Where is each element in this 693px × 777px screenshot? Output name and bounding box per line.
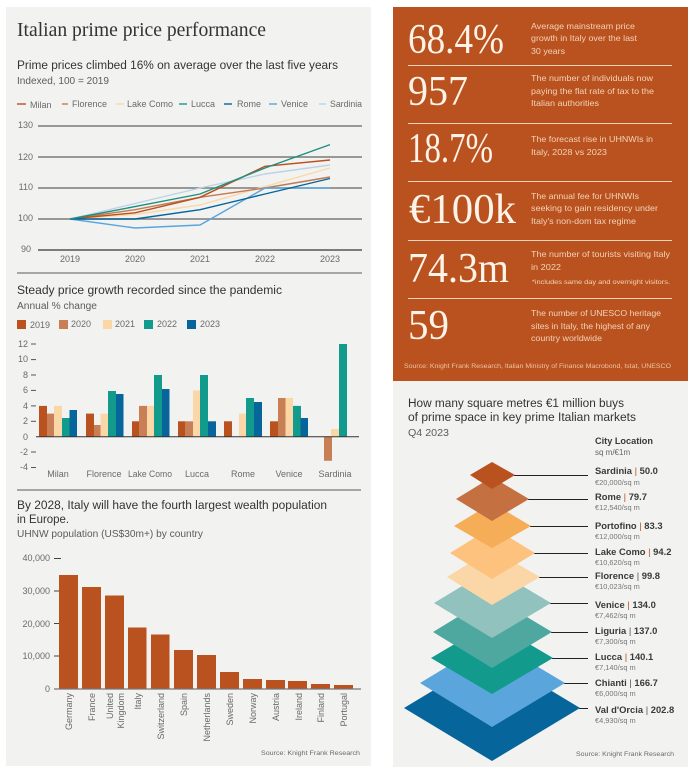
label: Liguria [595, 625, 657, 646]
wealth bar chart: 30,000 [22, 586, 50, 596]
stat: 18.7%: The forecast rise in UHNWIs in [531, 134, 653, 144]
line chart subtitle: Indexed, 100 = 2019 [17, 76, 109, 87]
bars: Venice [270, 398, 308, 437]
wealth bar chart: 10,000 [22, 651, 50, 661]
wealth bar chart: France [87, 693, 97, 721]
grouped bar chart subtitle: Annual % change [17, 301, 97, 312]
label: Lake Como [595, 546, 671, 567]
stat: 74.3m: in 2022 [531, 262, 561, 272]
stat: 74.3m: 74.3m [408, 246, 509, 292]
stat: 68.4%: 68.4% [408, 17, 504, 63]
stat: 68.4%: growth in Italy over the last [531, 33, 638, 43]
label: Rome: Rome | 79.7 [595, 491, 647, 502]
stat: €100k [409, 187, 658, 233]
pyramid diagram [404, 462, 580, 761]
stat: 957: The number of individuals now [531, 73, 654, 83]
line chart legend [17, 99, 362, 110]
grouped bar chart: Lucca [185, 469, 209, 479]
line chart: 90 [21, 244, 31, 254]
bars: Milan [39, 406, 77, 437]
bars: Lake Como [132, 375, 170, 437]
line chart legend: Milan [30, 100, 52, 110]
grouped bar chart: 0 [23, 432, 28, 442]
bars: Rome [224, 398, 262, 437]
stat: 59: The number of UNESCO heritage [531, 308, 661, 318]
grouped bar chart: Florence [86, 469, 122, 479]
pyramid heading: of prime space in key prime Italian markets [408, 410, 636, 424]
label: Rome [595, 491, 647, 512]
label: Sardinia: Sardinia | 50.0 [595, 465, 658, 476]
wealth chart heading: By 2028, Italy will have the fourth largest wealth population [17, 498, 327, 512]
bars: Lucca [178, 375, 216, 437]
line chart legend: Venice [281, 99, 308, 109]
label: Chianti: Chianti | 166.7 [595, 677, 658, 688]
line chart: 130 [18, 120, 33, 130]
grouped bar chart: 4 [23, 401, 28, 411]
stat: 59 [408, 303, 661, 349]
stat: 68.4% [408, 17, 638, 63]
title: Italian prime price performance [17, 19, 266, 41]
stat: 18.7% [408, 126, 653, 172]
grouped bar chart legend: 2023 [200, 319, 220, 329]
label: Portofino [595, 520, 663, 541]
label: Val d'Orcia: €4,930/sq m [595, 716, 636, 725]
label: Liguria: Liguria | 137.0 [595, 625, 657, 636]
wealth bar chart: Germany [64, 693, 74, 730]
wealth bar chart: 0 [45, 684, 50, 694]
label: Chianti [595, 677, 658, 698]
label: Florence [595, 570, 660, 591]
bars: Florence [86, 391, 124, 437]
pyramid subtitle: Q4 2023 [408, 428, 449, 439]
legend header: City Location [595, 435, 653, 446]
label: Lake Como: Lake Como | 94.2 [595, 546, 671, 557]
grouped bar chart: Sardinia [318, 469, 352, 479]
grouped bar chart: -4 [20, 462, 28, 472]
wealth bar chart [22, 553, 361, 742]
stat: 18.7%: 18.7% [408, 126, 493, 172]
label: Lucca: €7,140/sq m [595, 663, 636, 672]
pyramid heading [408, 396, 636, 424]
label: Sardinia: €20,000/sq m [595, 478, 640, 487]
stat: €100k: seeking to gain residency under [531, 203, 658, 213]
wealth bar chart: Austria [271, 693, 281, 721]
source: Source: Knight Frank Research, Italian Ministry of Finance Macrobond, Istat, UNESCO [404, 363, 671, 370]
line chart heading: Prime prices climbed 16% on average over the last five years [17, 58, 338, 72]
stat: 74.3m: The number of tourists visiting Italy [531, 249, 671, 259]
legend header: sq m/€1m [595, 448, 630, 457]
wealth bar chart: Kingdom [116, 693, 126, 729]
wealth chart heading line 2: in Europe. [17, 512, 69, 526]
wealth bar chart: Italy [133, 693, 143, 710]
source: Source: Knight Frank Research [261, 750, 360, 757]
grouped bar chart legend: 2021 [115, 319, 135, 329]
line chart: 2019 [60, 254, 80, 264]
wealth bar chart: Spain [179, 693, 189, 716]
label: Venice: Venice | 134.0 [595, 599, 656, 610]
line chart: 2020 [125, 254, 145, 264]
stat: 59: country worldwide [531, 333, 602, 343]
grouped bar chart: Milan [47, 469, 69, 479]
label: Chianti: €6,000/sq m [595, 689, 636, 698]
wealth chart subtitle: UHNW population (US$30m+) by country [17, 529, 203, 540]
panel: square metres per €1 million [393, 381, 688, 767]
wealth bar chart: Finland [316, 693, 326, 723]
line chart: 100 [18, 213, 33, 223]
label: Val d'Orcia [595, 704, 674, 725]
stat: 18.7%: Italy, 2028 vs 2023 [531, 147, 607, 157]
grouped bar chart: Lake Como [128, 469, 172, 479]
label: Rome: €12,540/sq m [595, 503, 640, 512]
wealth bar chart: 40,000 [22, 553, 50, 563]
label: Portofino: €12,000/sq m [595, 532, 640, 541]
label: Lucca: Lucca | 140.1 [595, 651, 653, 662]
panel: Italian prime price performance [6, 7, 371, 766]
label: Val d'Orcia: Val d'Orcia | 202.8 [595, 704, 674, 715]
stat: 68.4%: Average mainstream price [531, 21, 635, 31]
label: Venice: €7,462/sq m [595, 611, 636, 620]
stat: 957: paying the flat rate of tax to the [531, 86, 654, 96]
line chart legend: Rome [237, 99, 261, 109]
label: Liguria: €7,300/sq m [595, 637, 636, 646]
wealth bar chart: Sweden [225, 693, 235, 726]
wealth bar chart: Netherlands [202, 693, 212, 742]
source: Source: Knight Frank Research [576, 751, 674, 758]
wealth bar chart: Ireland [294, 693, 304, 721]
panel: key statistics [393, 7, 688, 381]
pyramid heading: How many square metres €1 million buys [408, 396, 624, 410]
stat: 74.3m: *includes same day and overnight visitors. [532, 279, 670, 286]
grouped bar chart heading: Steady price growth recorded since the pandemic [17, 283, 282, 297]
wealth bar chart: Norway [248, 693, 258, 724]
grouped bar chart: 8 [23, 370, 28, 380]
label: Lucca [595, 651, 653, 672]
wealth bar chart: 20,000 [22, 619, 50, 629]
stat: €100k: Italy's non-dom tax regime [531, 216, 636, 226]
legend header [595, 435, 653, 457]
grouped bar chart: 10 [18, 354, 28, 364]
grouped bar chart legend: 2022 [157, 319, 177, 329]
label: Lake Como: €10,620/sq m [595, 558, 640, 567]
stat: 59: sites in Italy, the highest of any [531, 321, 651, 331]
line chart legend: Florence [72, 99, 107, 109]
stat: 74.3m [408, 246, 671, 292]
grouped bar chart legend: 2020 [71, 319, 91, 329]
grouped bar chart: -2 [20, 447, 28, 457]
grouped bar chart: 6 [23, 385, 28, 395]
wealth bar chart: Portugal [339, 693, 349, 727]
leader lines [514, 476, 588, 708]
stat: 957 [408, 69, 654, 115]
grouped bar chart: Venice [275, 469, 303, 479]
stat: 59: 59 [408, 303, 449, 349]
line chart: 2022 [255, 254, 275, 264]
grouped bar chart legend: 2019 [30, 320, 50, 330]
wealth bar chart: United [105, 693, 115, 719]
stat: €100k: €100k [409, 187, 516, 233]
bars: Sardinia [324, 344, 347, 461]
grouped bar chart [18, 339, 359, 479]
line chart legend: Sardinia [330, 99, 362, 109]
line chart: 110 [19, 182, 33, 192]
stat: €100k: The annual fee for UHNWIs [531, 191, 639, 201]
label: Portofino: Portofino | 83.3 [595, 520, 663, 531]
grouped bar chart: Rome [231, 469, 255, 479]
line chart [18, 120, 362, 264]
grouped bar chart legend [17, 319, 220, 330]
grouped bar chart: 12 [18, 339, 28, 349]
label: Florence: €10,023/sq m [595, 582, 640, 591]
stat: 957: Italian authorities [531, 98, 599, 108]
line chart legend: Lake Como [127, 99, 173, 109]
label: Florence: Florence | 99.8 [595, 570, 660, 581]
wealth bar chart: Switzerland [156, 693, 166, 740]
label: Venice [595, 599, 656, 620]
line chart: 120 [18, 152, 33, 162]
stat: 957: 957 [408, 69, 468, 115]
line chart: 2023 [320, 254, 340, 264]
line chart: 2021 [190, 254, 210, 264]
label: Sardinia [595, 465, 658, 487]
grouped bar chart: 2 [23, 416, 28, 426]
line chart legend: Lucca [191, 99, 215, 109]
stat: 68.4%: 30 years [531, 46, 565, 56]
